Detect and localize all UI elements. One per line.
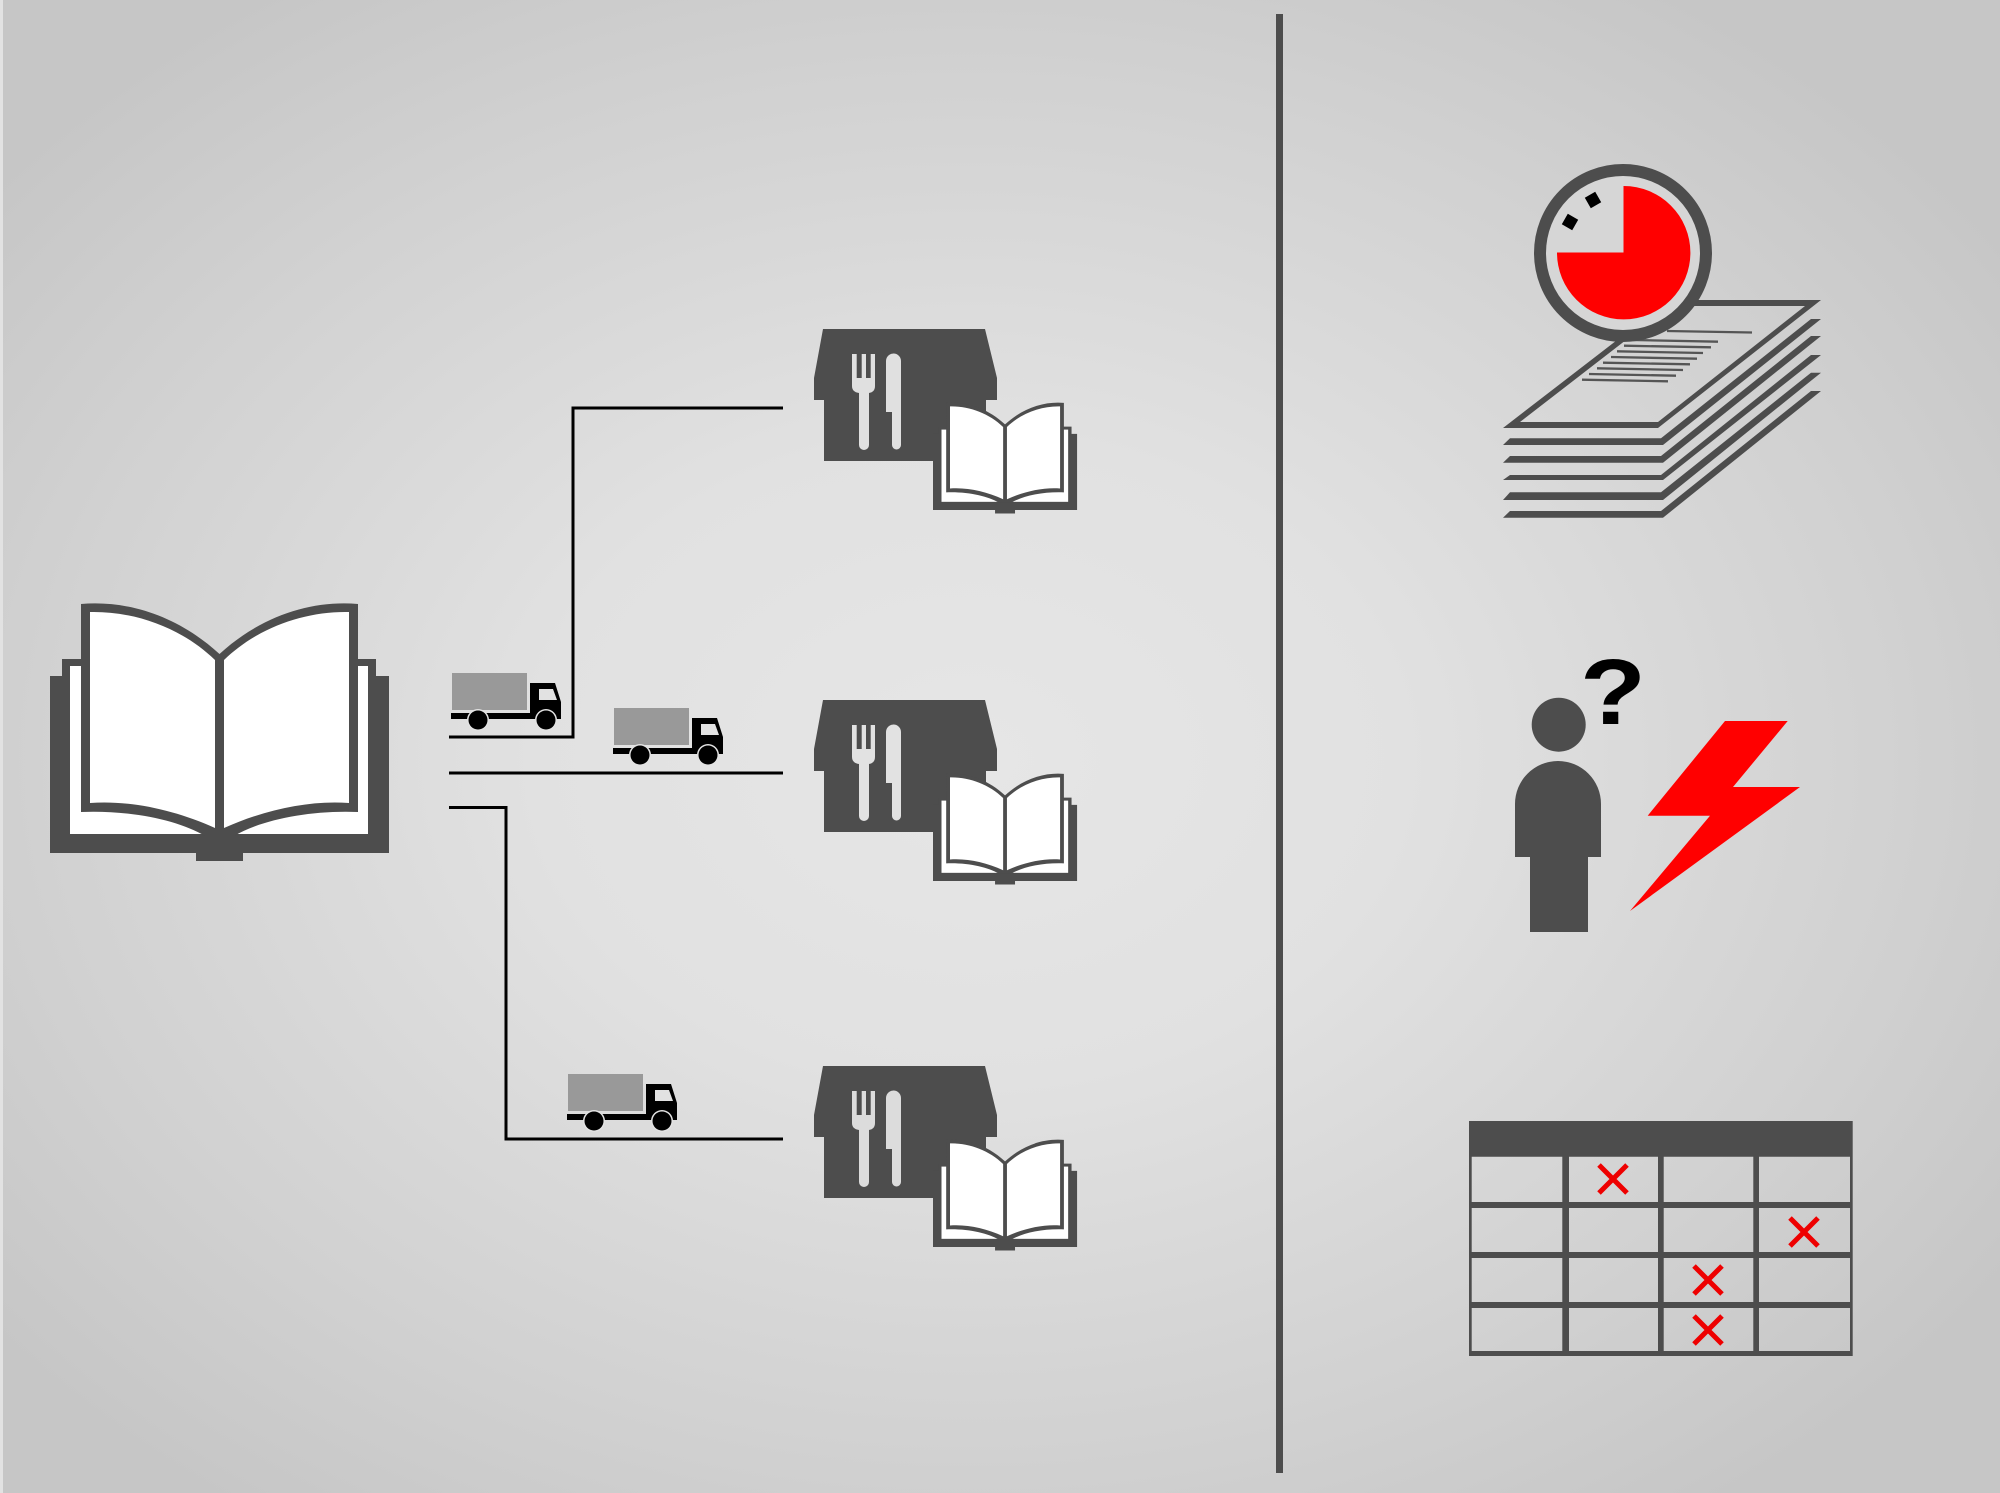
icon: restaurant with menu middle [814,700,1077,884]
clock red pie [1557,186,1690,319]
icon: truck top [451,673,561,731]
connector: top branch [449,408,783,737]
icon: paper stack with timer [1503,170,1821,518]
icon: truck bottom [567,1074,677,1132]
lightning bolt [1630,721,1800,911]
left edge strip [0,0,3,1493]
icon: truck middle [613,708,723,766]
table grid [1469,1121,1853,1356]
red crosses [1599,1165,1818,1344]
clock tick marks [1562,192,1601,230]
paper stack [1503,300,1821,518]
clock ring [1540,170,1706,336]
icon: confused person with lightning [1515,641,1800,932]
icon: restaurant with menu bottom [814,1066,1077,1250]
paper text lines [1582,331,1752,381]
icon: restaurant with menu top [814,329,1077,513]
person head [1532,698,1586,752]
connector: middle branch [449,772,783,774]
vertical divider [1276,14,1283,1473]
connector: bottom branch [449,808,783,1139]
icon: large open book [50,603,389,861]
person body [1515,761,1601,932]
icon: schedule table with crosses [1469,1121,1853,1356]
question mark: ? [1580,641,1646,744]
